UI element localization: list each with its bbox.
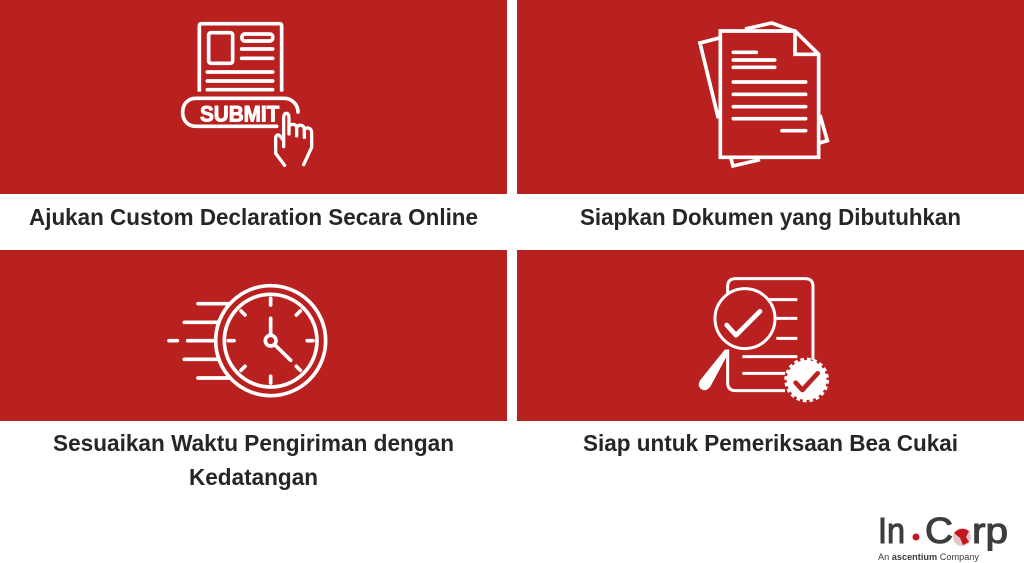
heading: ready for inspection: Siap untuk Pemeriksaan Bea Cukai	[583, 430, 958, 456]
icon: fast clock	[169, 286, 326, 396]
heading: match shipping time	[53, 430, 454, 490]
panel: documents	[517, 0, 1024, 194]
panel: submit online	[0, 0, 507, 194]
icon: submit form with pointing hand	[183, 24, 312, 165]
heading: submit online: Ajukan Custom Declaration Secara Online	[29, 204, 478, 230]
logo: InCorp	[878, 510, 1008, 562]
heading: match shipping time: Kedatangan	[189, 464, 318, 490]
icon: submit form with pointing hand: SUBMIT	[200, 102, 280, 127]
heading: match shipping time: Sesuaikan Waktu Pengiriman dengan	[53, 430, 454, 456]
icon: magnifier checklist with badge	[699, 279, 827, 401]
logo globe	[953, 528, 971, 546]
logo: InCorp: In	[878, 510, 905, 551]
logo: InCorp: C	[925, 510, 953, 551]
panel: timing	[0, 250, 507, 421]
logo: InCorp: An ascentium Company	[878, 552, 979, 562]
icon: stacked documents	[700, 23, 827, 166]
logo: InCorp: rp	[972, 510, 1008, 551]
panel: inspection	[517, 250, 1024, 421]
heading: prepare documents: Siapkan Dokumen yang Dibutuhkan	[580, 204, 961, 230]
